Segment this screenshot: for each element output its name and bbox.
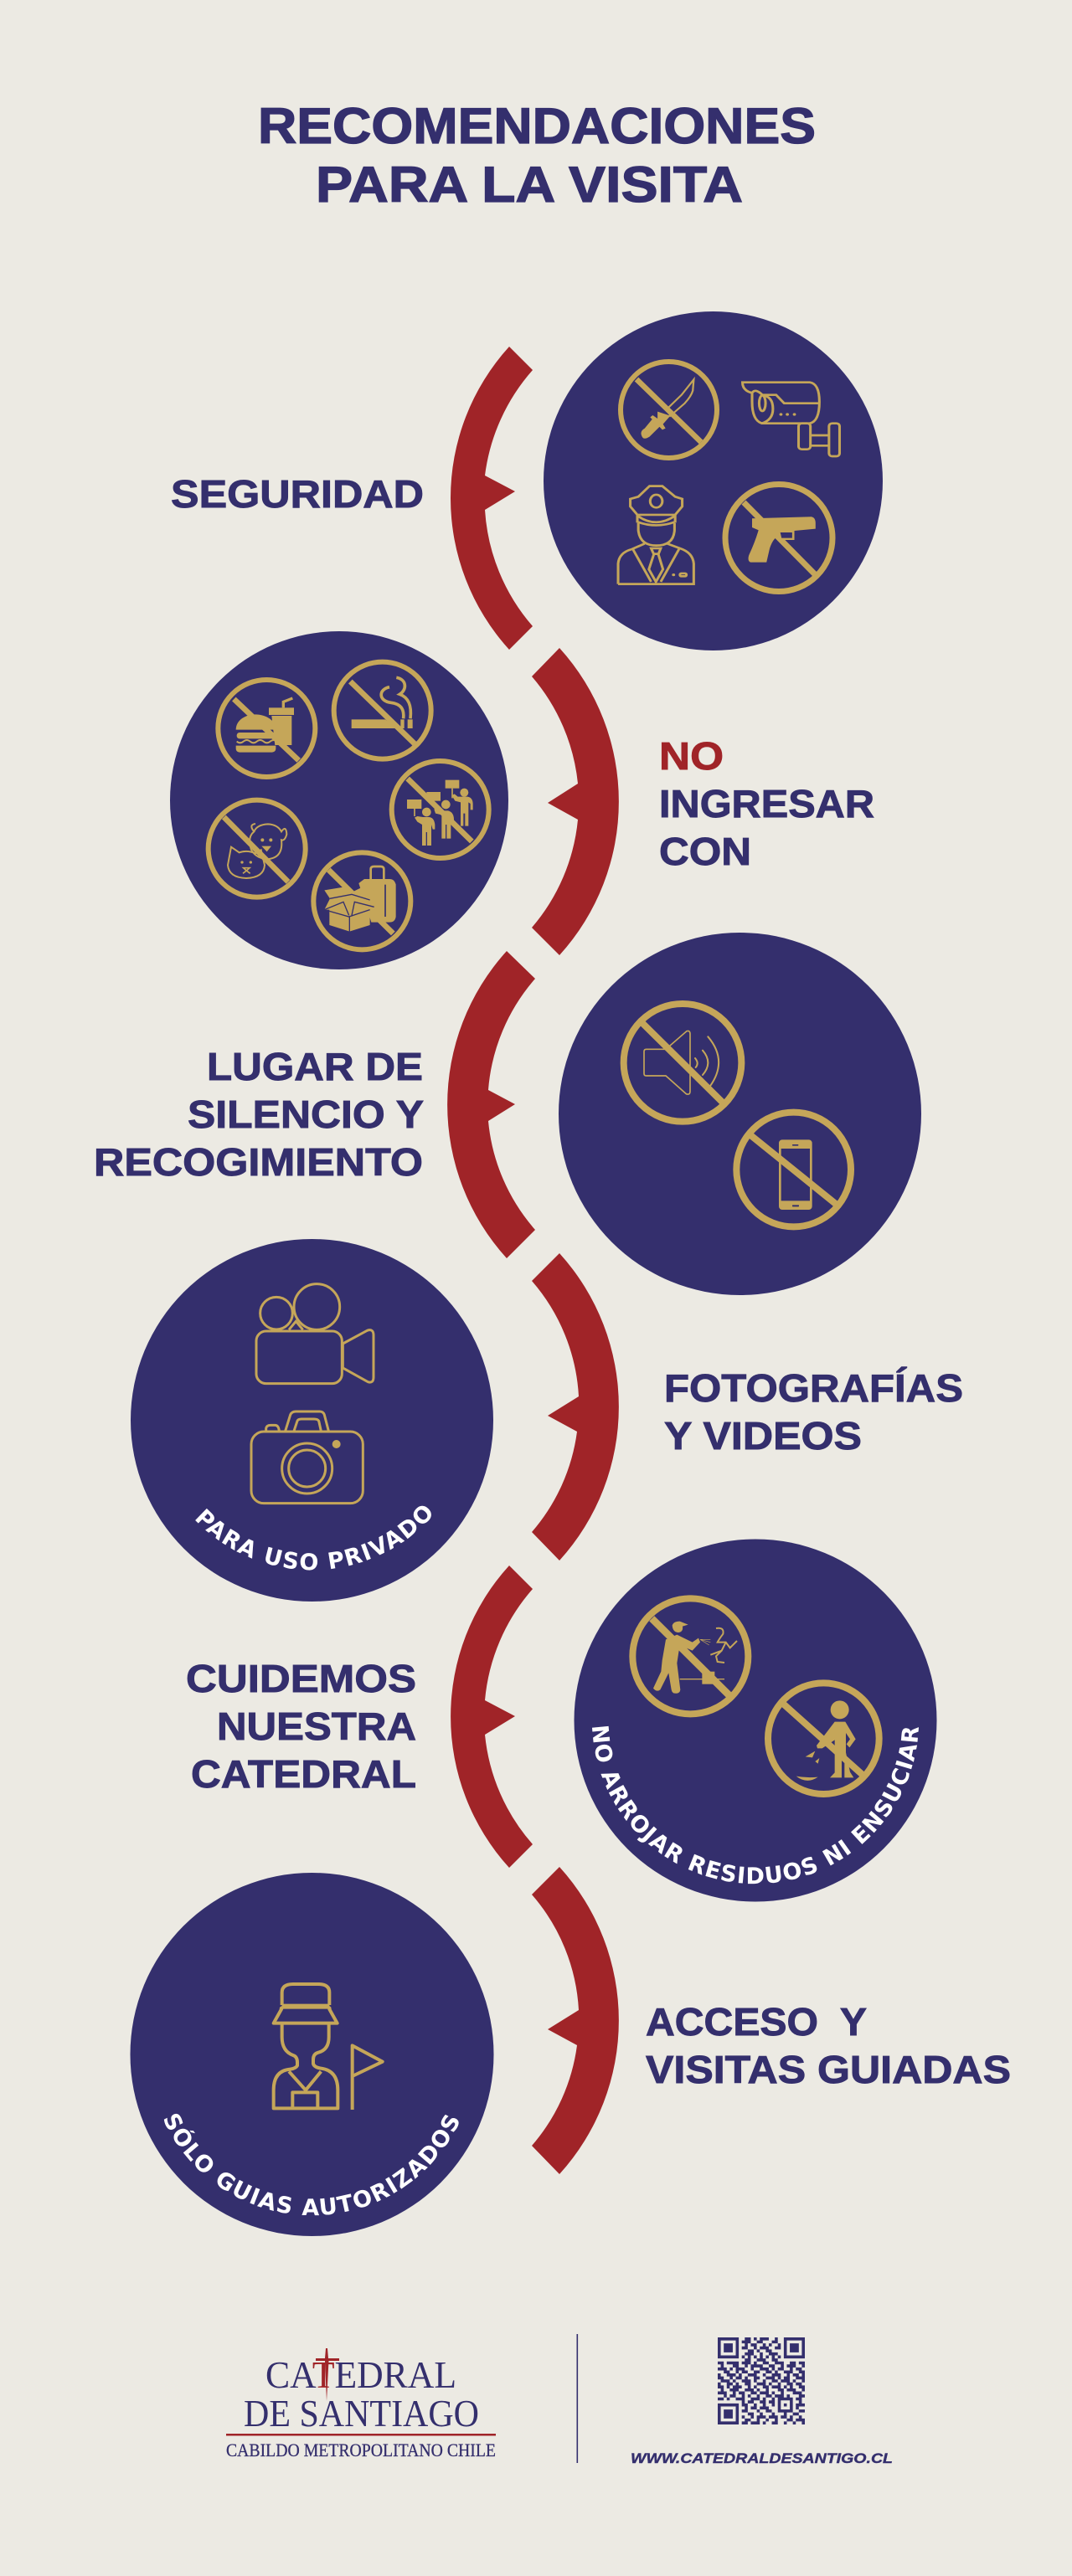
label: fotografías y videos: FOTOGRAFÍAS	[664, 1366, 963, 1410]
curved caption: para uso privado: PARA USO PRIVADO	[195, 1505, 431, 1571]
logo: catedral de santiago: DE SANTIAGO	[244, 2392, 479, 2435]
icon: no littering	[768, 1683, 879, 1794]
title: RECOMENDACIONES	[258, 98, 816, 154]
icon: no sound	[624, 1004, 741, 1122]
arc 3	[447, 951, 535, 1258]
timeline arcs	[447, 347, 619, 2174]
label: acceso y visitas guiadas: VISITAS GUIADAS	[646, 2048, 1011, 2091]
icon: no boxes or luggage	[313, 852, 410, 949]
label: no ingresar con: INGRESAR	[659, 782, 874, 825]
panel: no ingresar con	[170, 631, 508, 969]
icon: photo camera	[251, 1411, 363, 1504]
label: lugar de silencio y recogimiento: SILENCIO Y	[188, 1093, 424, 1136]
label: cuidemos nuestra catedral: CATEDRAL	[191, 1752, 416, 1796]
label: lugar de silencio y recogimiento	[94, 1045, 424, 1184]
icon: no knives	[621, 362, 717, 458]
label: fotografías y videos	[664, 1366, 963, 1458]
label: cuidemos nuestra catedral: NUESTRA	[217, 1704, 416, 1748]
label: acceso y visitas guiadas: ACCESO Y	[646, 2000, 867, 2044]
arc 1	[451, 347, 533, 650]
label: seguridad: SEGURIDAD	[171, 472, 424, 516]
panel: cuidemos nuestra catedral	[575, 1539, 936, 1902]
icon: tour guide with flag	[274, 1984, 383, 2110]
icon: police officer	[618, 486, 693, 584]
label: fotografías y videos: Y VIDEOS	[664, 1414, 862, 1458]
icon: no food or drink	[218, 680, 315, 777]
panel: seguridad	[544, 311, 883, 650]
panel: silencio	[559, 933, 921, 1295]
arc 6	[532, 1867, 619, 2174]
icon: no smoking	[334, 662, 431, 759]
panel: acceso y visitas guiadas	[131, 1873, 494, 2236]
label: cuidemos nuestra catedral: CUIDEMOS	[186, 1657, 416, 1700]
logo: catedral de santiago: CABILDO METROPOLITANO CHILE	[226, 2440, 496, 2460]
icon: no firearms	[725, 484, 832, 591]
icon: no protests	[392, 761, 489, 858]
icon: video camera	[256, 1284, 374, 1384]
qr code	[718, 2339, 805, 2423]
label: lugar de silencio y recogimiento: RECOGIMIENTO	[94, 1140, 423, 1184]
curved caption: sólo guias autorizados: SÓLO GUIAS AUTORIZADOS	[164, 2113, 459, 2215]
title	[258, 98, 816, 213]
arc 2	[532, 648, 619, 955]
icon: no mobile phones	[736, 1113, 851, 1226]
arc 4	[532, 1253, 619, 1561]
divider	[576, 2334, 578, 2463]
logo: catedral de santiago	[226, 2348, 496, 2460]
icon: red cross	[316, 2348, 339, 2401]
arc 5	[451, 1566, 533, 1868]
website url: WWW.CATEDRALDESANTIGO.CL	[631, 2450, 893, 2466]
label: no ingresar con	[659, 734, 874, 873]
label: acceso y visitas guiadas	[646, 2000, 1011, 2091]
label: no ingresar con: CON	[659, 830, 751, 873]
icon: security camera	[743, 383, 839, 456]
label: lugar de silencio y recogimiento: LUGAR DE	[207, 1045, 423, 1088]
title: PARA LA VISITA	[316, 157, 743, 213]
icon: no graffiti	[632, 1598, 748, 1714]
label: cuidemos nuestra catedral	[186, 1657, 416, 1796]
label: no ingresar con: NO	[659, 734, 724, 778]
curved caption: no arrojar residuos ni ensuciar: NO ARROJAR RESIDUOS NI ENSUCIAR	[592, 1726, 919, 1884]
logo: catedral de santiago: CATEDRAL	[265, 2353, 456, 2396]
icon: no pets	[209, 800, 306, 897]
panel: fotografías y videos	[131, 1239, 493, 1602]
